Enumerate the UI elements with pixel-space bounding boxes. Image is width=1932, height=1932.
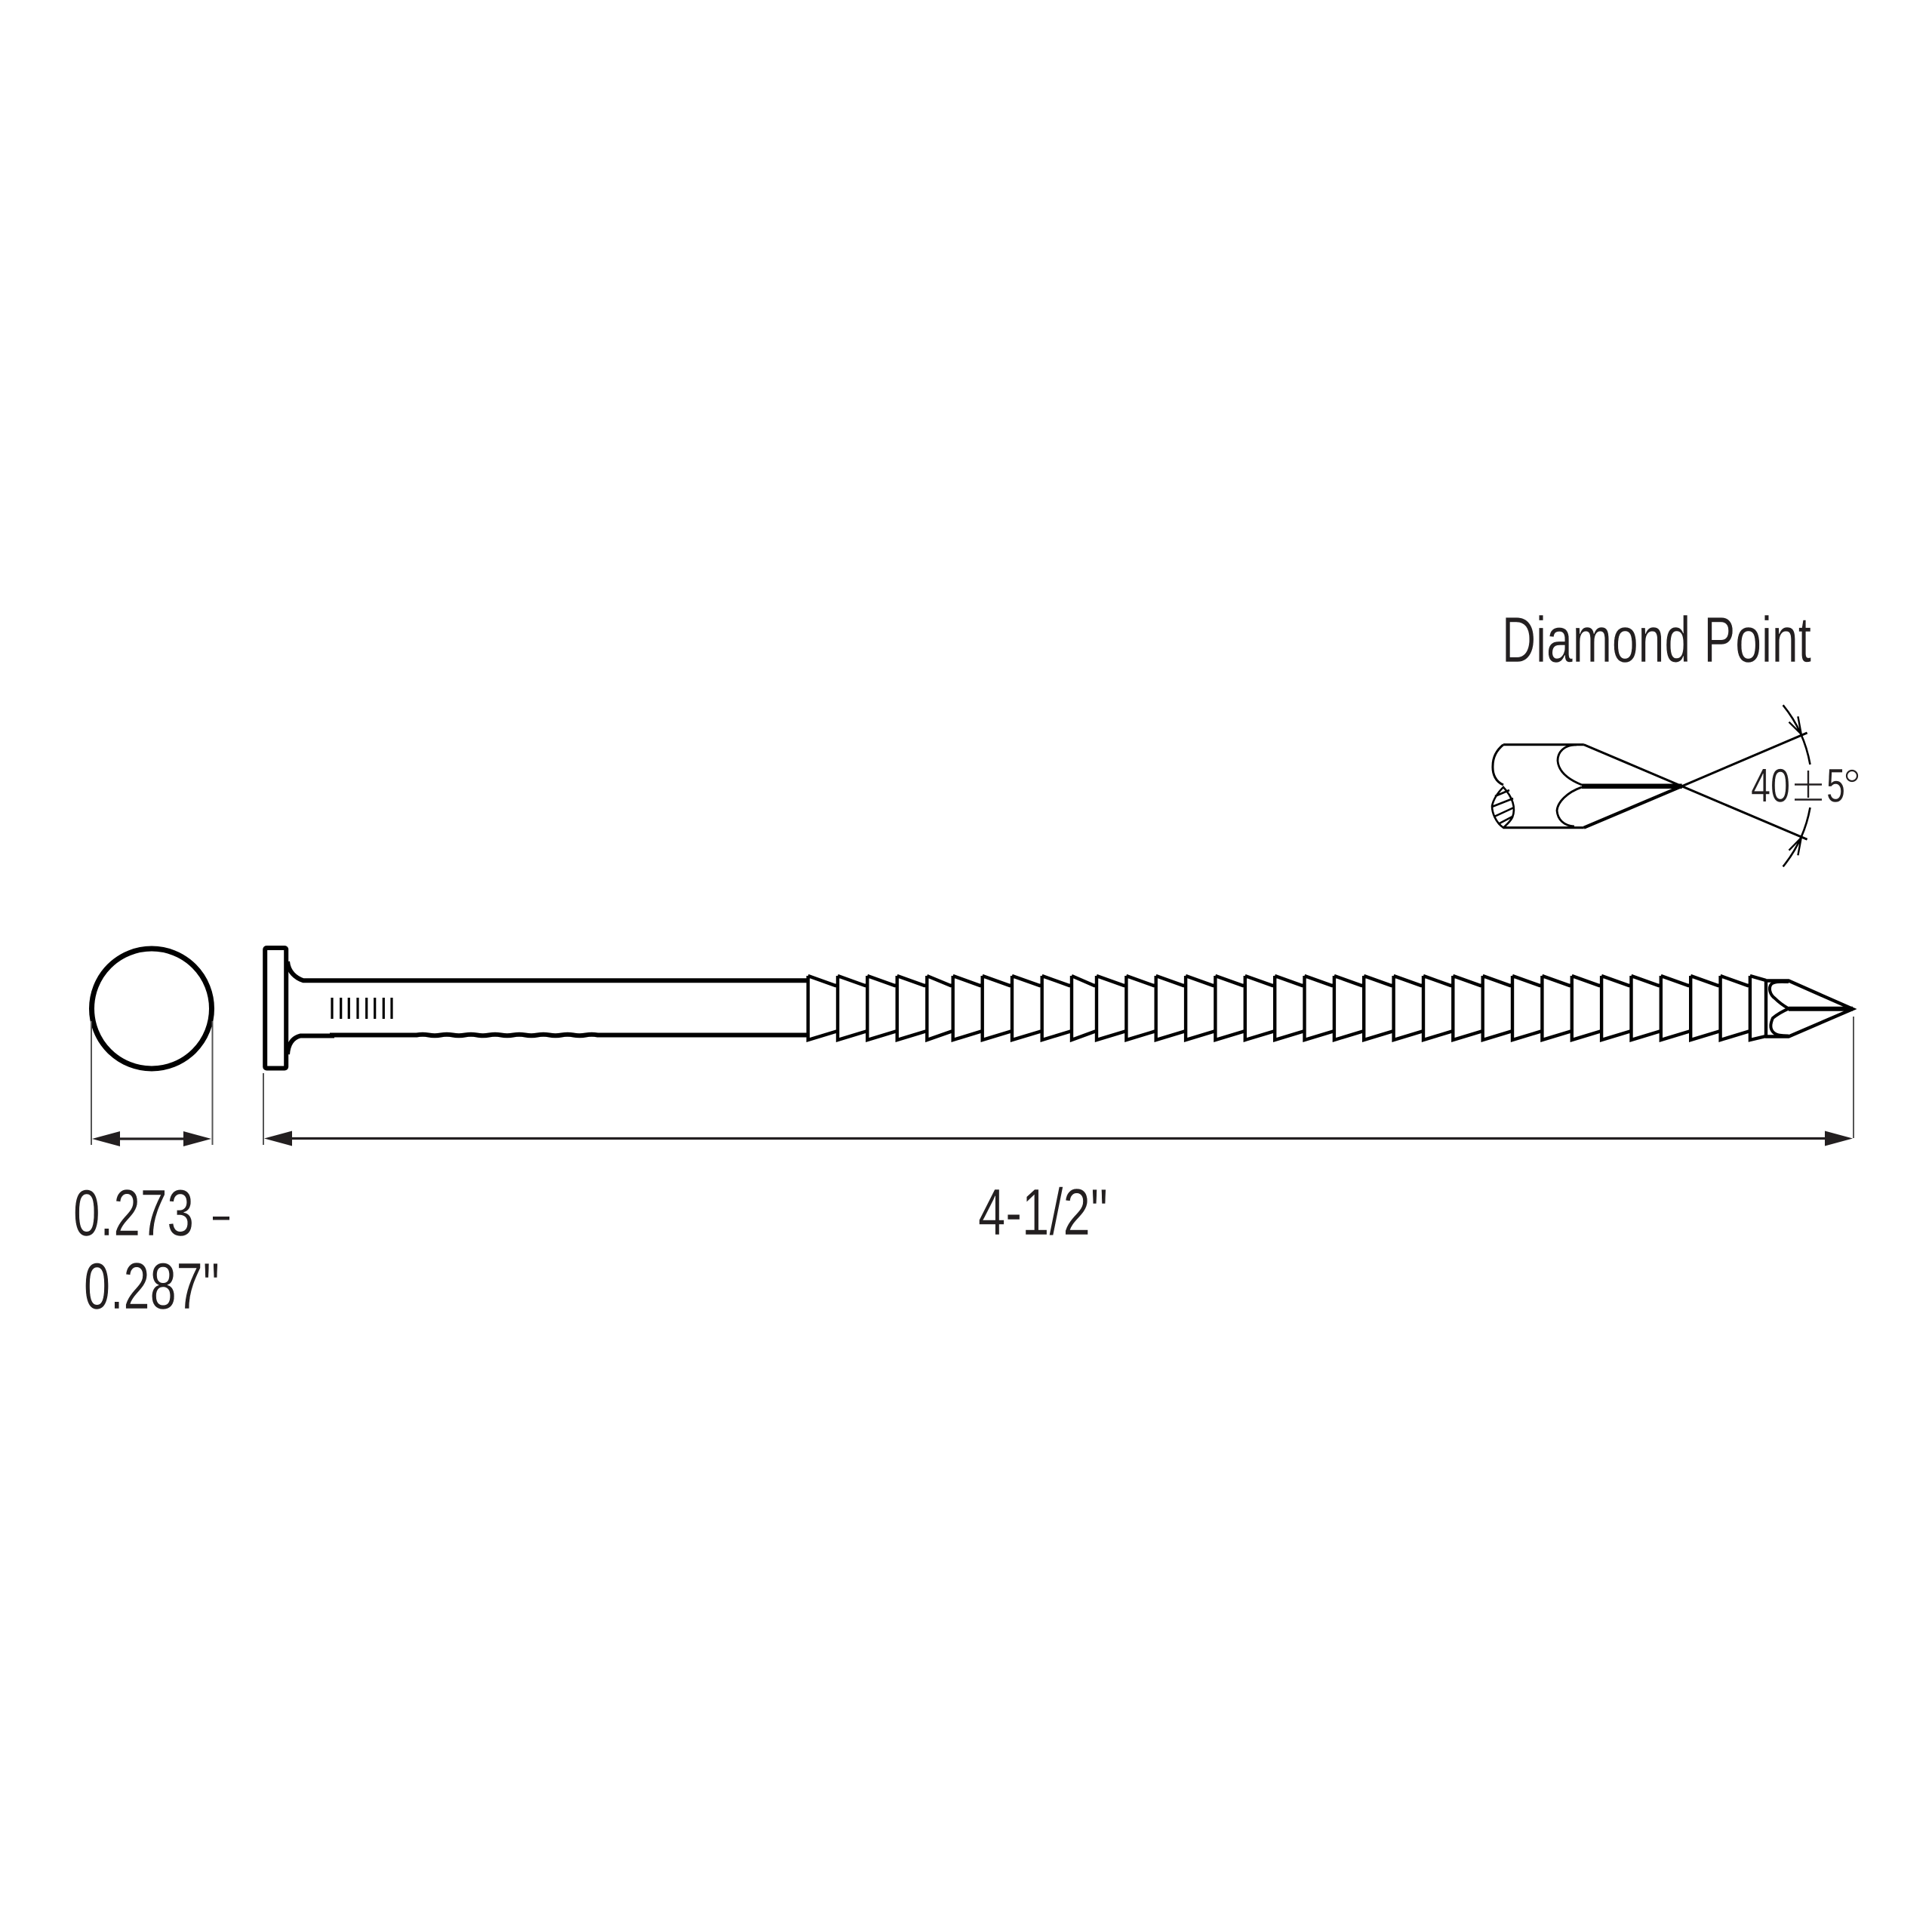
broken end	[1493, 745, 1503, 785]
ring threads	[808, 976, 1766, 1040]
shank outline	[1503, 745, 1584, 828]
nail shank	[288, 961, 808, 1054]
shank marks	[332, 998, 392, 1019]
diamond point title: Diamond Point	[1502, 605, 1811, 676]
diamond point detail drawing	[1492, 705, 1810, 866]
point edges	[1584, 745, 1807, 839]
diameter label	[73, 1177, 229, 1323]
overall length dimension	[263, 1017, 1854, 1146]
angle label: 5	[1826, 760, 1845, 813]
angle arc	[1783, 705, 1810, 866]
diameter label: 0.287"	[84, 1250, 220, 1323]
nail side view	[265, 948, 1853, 1069]
point facets	[1557, 745, 1582, 826]
angle label: 40	[1751, 760, 1790, 813]
diameter label: 0.273	[73, 1177, 194, 1250]
nail head	[265, 948, 286, 1069]
diameter dimension	[91, 1021, 213, 1146]
length label: 4-1/2"	[978, 1176, 1108, 1249]
section hatch	[1492, 787, 1514, 828]
nail head end view circle	[92, 949, 211, 1069]
angle label	[1751, 760, 1857, 813]
angle arrows	[1789, 716, 1801, 855]
nail point	[1765, 980, 1853, 1037]
